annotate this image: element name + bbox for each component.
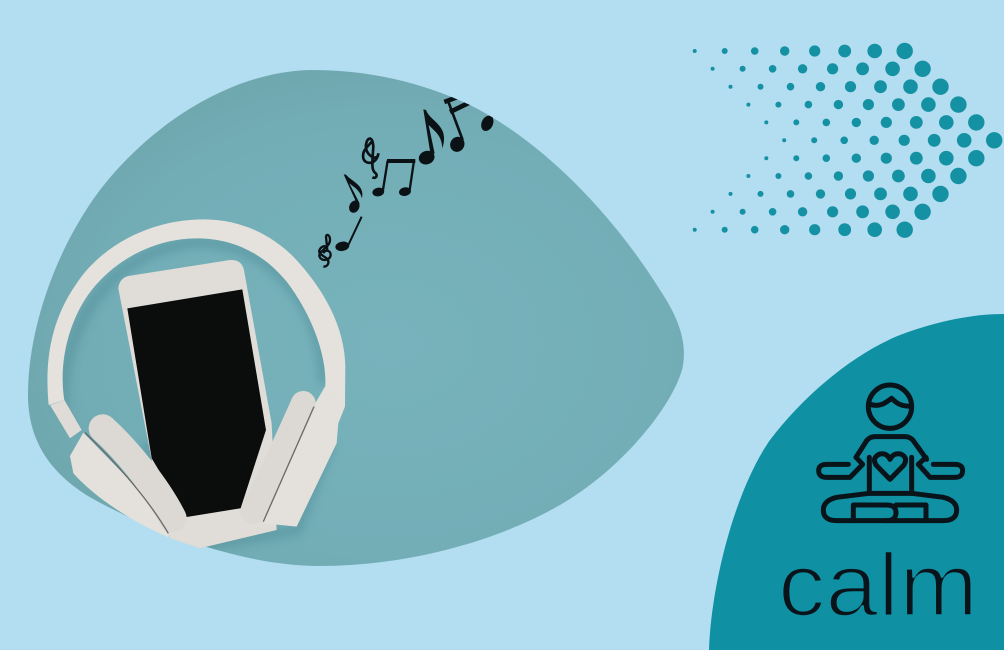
phone [118, 260, 277, 548]
left earcup [50, 400, 173, 537]
headband [47, 219, 345, 407]
icon: music notes [319, 97, 496, 267]
panel: teal blob [28, 70, 684, 566]
headphone shadow [63, 242, 330, 547]
panel: calm corner [709, 314, 1004, 650]
dotted arrow [693, 43, 1002, 238]
heading: calm: calm [778, 534, 978, 634]
phone screen [127, 289, 266, 517]
right earcup [253, 387, 345, 527]
icon: headphones and phone [47, 219, 345, 548]
icon: meditating figure with heart [819, 385, 963, 521]
